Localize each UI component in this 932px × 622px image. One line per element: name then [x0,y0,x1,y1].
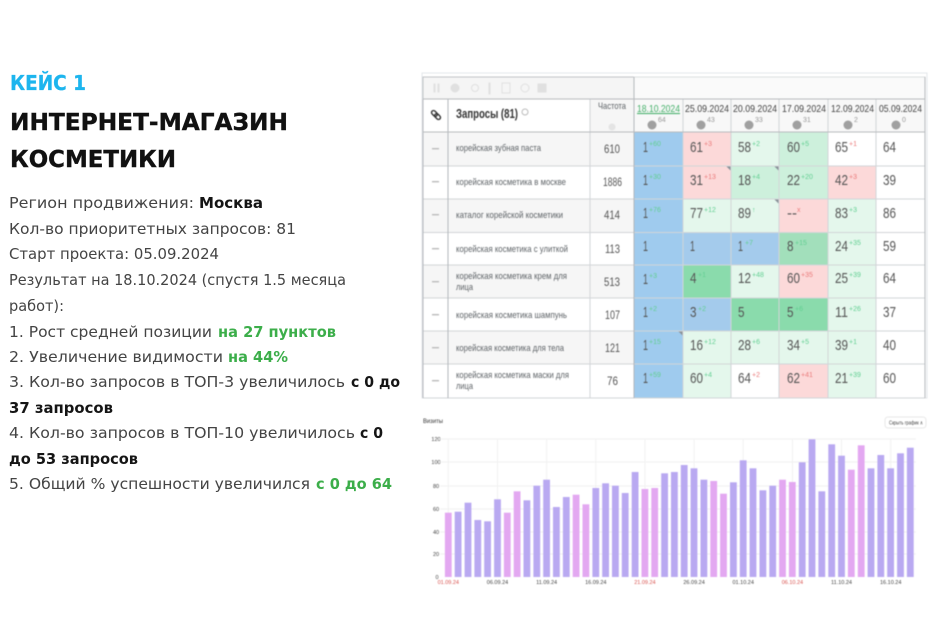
row: корейская косметика маски для лица: 21 [835,370,848,387]
row: каталог корейской косметики [432,205,896,222]
row: корейская косметика с улиткой: 1 [690,238,695,255]
row: корейская зубная паста: 64 [883,139,896,156]
table header: 64 [658,117,666,124]
row: корейская зубная паста: 61 [690,139,703,156]
row: корейская зубная паста: 65 [835,139,848,156]
x axis dates: 06.10.24 [782,580,803,586]
hide chart button [885,417,926,428]
row: корейская косметика маски для лица: корейская косметика маски для [456,370,569,381]
row: корейская косметика с улиткой: +15 [795,240,807,247]
table header [423,99,925,132]
row: корейская косметика для тела [432,337,896,355]
table header: 43 [707,117,715,124]
results list: с 0 до 64 [316,475,392,493]
row: корейская зубная паста: +2 [752,141,760,148]
weekday bars [455,439,914,577]
row: корейская косметика для тела: корейская косметика для тела [456,343,565,354]
row: каталог корейской косметики: 414 [604,210,621,222]
row: корейская зубная паста: +1 [849,141,857,148]
project details text block: работ): [9,297,64,315]
row: корейская косметика маски для лица: 60 [883,370,896,387]
row: корейская косметика маски для лица: 64 [738,370,751,387]
y axis: 0 [435,575,439,581]
row: корейская косметика шампунь: +2 [649,306,657,313]
row: корейская косметика крем для лица: 4 [690,270,696,287]
row: корейская зубная паста: +5 [801,141,809,148]
row: корейская косметика шампунь: +6 [795,306,803,313]
row: корейская косметика крем для лица: +35 [801,272,813,279]
row: корейская косметика для тела: +6 [752,339,760,346]
results list: 4. Кол-во запросов в ТОП-10 увеличилось [9,424,355,442]
row: корейская косметика в москве: 1886 [603,177,622,189]
row: корейская косметика для тела: 121 [605,343,620,355]
row: корейская косметика в москве: +4 [752,174,760,181]
results list: с 0 до [351,373,400,391]
results list: на 27 пунктов [218,323,336,341]
grid lines [440,439,916,577]
row: корейская косметика шампунь: +26 [849,306,861,313]
y axis: 40 [433,530,439,536]
row: корейская косметика в москве: 1 [643,172,648,189]
row: корейская косметика в москве: 18 [738,172,751,189]
table header: 05.09.2024 [879,103,922,115]
y axis: 120 [431,437,441,443]
table header: 20.09.2024 [733,103,777,115]
row: корейская косметика маски для лица: +59 [649,372,661,379]
row: корейская косметика с улиткой: корейская косметика с улиткой [456,244,568,255]
row: корейская косметика с улиткой: 113 [605,244,620,256]
row: корейская косметика маски для лица: +2 [752,372,760,379]
project details text block: Старт проекта: 05.09.2024 [9,245,219,263]
table header: 33 [755,117,763,124]
y axis: 60 [433,507,439,513]
corner markers [678,166,779,336]
x axis dates: 11.10.24 [831,580,852,586]
row: корейская зубная паста: +3 [704,141,712,148]
row: корейская косметика в москве: 42 [835,172,848,189]
row: корейская косметика в москве: +20 [801,174,813,181]
row: корейская косметика для тела: 1 [643,337,648,354]
table header: 12.09.2024 [831,103,874,115]
row: корейская косметика для тела: 28 [738,337,751,354]
row: корейская косметика крем для лица: 60 [787,270,800,287]
row: каталог корейской косметики: 77 [690,205,703,222]
x axis dates: 16.10.24 [880,580,901,586]
title: КОСМЕТИКИ [10,145,176,173]
results list: 2. Увеличение видимости [9,348,223,366]
results list: 1. Рост средней позиции [9,323,212,341]
row: корейская косметика маски для лица: +39 [849,372,861,379]
column 18.10 blue [634,132,683,398]
hide chart button: Скрыть график ∧ [889,420,923,426]
row: корейская косметика маски для лица: 60 [690,370,703,387]
table header: Частота [598,101,627,112]
x axis dates: 11.09.24 [536,580,557,586]
row: корейская косметика с улиткой: 8 [787,238,794,255]
row: корейская косметика шампунь: 1 [643,304,648,321]
row: корейская косметика крем для лица: 513 [604,277,620,289]
row: корейская косметика в москве: +3 [849,174,857,181]
row: корейская косметика для тела: 39 [835,337,848,354]
x axis dates [438,580,901,586]
row: корейская косметика крем для лица: +3 [649,273,657,280]
title: ИНТЕРНЕТ-МАГАЗИН [10,108,288,136]
row: корейская косметика маски для лица [432,370,896,392]
row: корейская косметика шампунь: корейская косметика шампунь [456,310,567,321]
row: корейская косметика шампунь: 5 [738,304,744,321]
row: корейская косметика маски для лица: 76 [607,376,618,388]
row: корейская зубная паста: 1 [643,139,648,156]
row: корейская косметика для тела: +1 [849,339,857,346]
results list: с 0 [360,424,383,442]
row: корейская косметика с улиткой [432,238,896,256]
results list: 3. Кол-во запросов в ТОП-3 увеличилось [9,373,345,391]
row: корейская зубная паста: 60 [787,139,800,156]
row: корейская косметика в москве: +30 [649,174,661,181]
row: корейская косметика маски для лица: лица [456,381,474,392]
row: каталог корейской косметики: +3 [849,207,857,214]
case label: КЕЙС 1 [10,70,86,95]
row: корейская косметика с улиткой: +7 [745,240,753,247]
row: каталог корейской косметики: 89 [738,205,751,222]
row: корейская косметика маски для лица: +41 [801,372,813,379]
row: корейская косметика с улиткой: 59 [883,238,896,255]
weekend bars [445,445,865,577]
y axis: 100 [431,460,441,466]
y axis: 80 [433,484,439,490]
row: каталог корейской косметики: 1 [643,205,648,222]
row: каталог корейской косметики: 86 [883,205,896,222]
row: корейская косметика крем для лица: 64 [883,270,896,287]
row: корейская косметика для тела: +12 [704,339,716,346]
row: каталог корейской косметики: +76 [649,207,661,214]
row: корейская косметика крем для лица: +39 [849,272,861,279]
row: каталог корейской косметики: x [797,207,801,214]
table header: Запросы (81) [456,107,518,121]
x axis dates: 01.09.24 [438,580,459,586]
rankings table [422,73,927,398]
row: корейская косметика маски для лица: +4 [704,372,712,379]
visits bar chart [423,417,926,586]
row: корейская зубная паста: 610 [604,144,620,156]
row: корейская косметика крем для лица: 25 [835,270,848,287]
row: корейская косметика крем для лица: 1 [643,271,648,288]
row: корейская косметика шампунь: 5 [787,304,794,321]
row: каталог корейской косметики: 83 [835,205,848,222]
table grid [423,77,925,398]
row: каталог корейской косметики: ↑ [752,207,756,214]
row: корейская косметика крем для лица: лица [456,282,474,293]
row: корейская косметика в москве: корейская косметика в москве [456,177,566,188]
row: корейская косметика шампунь: 107 [605,310,620,322]
table header: 18.10.2024 [637,103,680,115]
row: корейская косметика маски для лица: 1 [643,370,648,387]
row: корейская косметика в москве: 22 [787,172,800,189]
table header: 25.09.2024 [685,103,729,115]
row: корейская косметика шампунь [432,304,896,322]
project details text block: Москва [199,194,263,212]
row: корейская косметика шампунь: 3 [690,304,696,321]
table header: 31 [803,117,811,124]
row backgrounds and heat cells [423,132,876,398]
row: корейская зубная паста: 58 [738,139,751,156]
project details text block: Регион продвижения: [9,194,194,212]
project details text block [9,194,346,315]
x axis dates: 16.09.24 [585,580,607,586]
row: корейская косметика с улиткой: 1 [643,238,648,255]
row: корейская косметика крем для лица: 12 [738,270,751,287]
row: корейская косметика шампунь: 11 [835,304,848,321]
row: корейская косметика с улиткой: +35 [849,240,861,247]
row: корейская косметика с улиткой: 24 [835,238,848,255]
row: корейская косметика шампунь: 37 [883,304,896,321]
row: корейская косметика с улиткой: 1 [738,238,743,255]
project details text block: Результат на 18.10.2024 (спустя 1.5 месяца [9,271,346,289]
results list: 37 запросов [9,399,113,417]
row: корейская зубная паста: +60 [649,141,661,148]
y axis: 20 [433,552,439,558]
row: корейская косметика шампунь: +2 [698,306,706,313]
row: корейская косметика крем для лица [432,270,896,293]
results list: 5. Общий % успешности увеличился [9,475,310,493]
chart title: Визиты [423,418,443,425]
row: корейская косметика в москве [432,172,896,189]
x axis dates: 06.09.24 [487,580,508,586]
row: каталог корейской косметики: каталог корейской косметики [456,210,563,221]
row: корейская косметика в москве: 39 [883,172,896,189]
results list: на 44% [228,348,288,366]
results list [9,323,400,493]
row: корейская косметика крем для лица: +1 [698,272,706,279]
row: корейская косметика для тела: 16 [690,337,703,354]
row: корейская косметика в москве: 31 [690,172,703,189]
row: корейская косметика для тела: 40 [883,337,896,354]
table header: 0 [902,117,906,124]
row: каталог корейской косметики: -- [787,205,797,222]
row: корейская косметика крем для лица: +48 [752,272,764,279]
project details text block: Кол-во приоритетных запросов: 81 [9,220,296,238]
row: корейская зубная паста: корейская зубная паста [456,143,542,154]
row: корейская косметика крем для лица: корейская косметика крем для [456,271,567,282]
y axis [431,437,441,581]
table header: 17.09.2024 [782,103,826,115]
row: корейская косметика для тела: +5 [801,339,809,346]
row: корейская косметика в москве: +13 [704,174,716,181]
row: каталог корейской косметики: +12 [704,207,716,214]
table header: 2 [854,117,858,124]
x axis dates: 01.10.24 [732,580,754,586]
icon: link [431,110,441,120]
row: корейская косметика для тела: +15 [649,339,661,346]
table toolbar [423,77,925,99]
row: корейская зубная паста [432,139,896,156]
row: корейская косметика маски для лица: 62 [787,370,800,387]
x axis dates: 26.09.24 [683,580,705,586]
row: корейская косметика для тела: 34 [787,337,800,354]
results list: до 53 запросов [9,450,138,468]
x axis dates: 21.09.24 [634,580,656,586]
title [10,108,288,173]
